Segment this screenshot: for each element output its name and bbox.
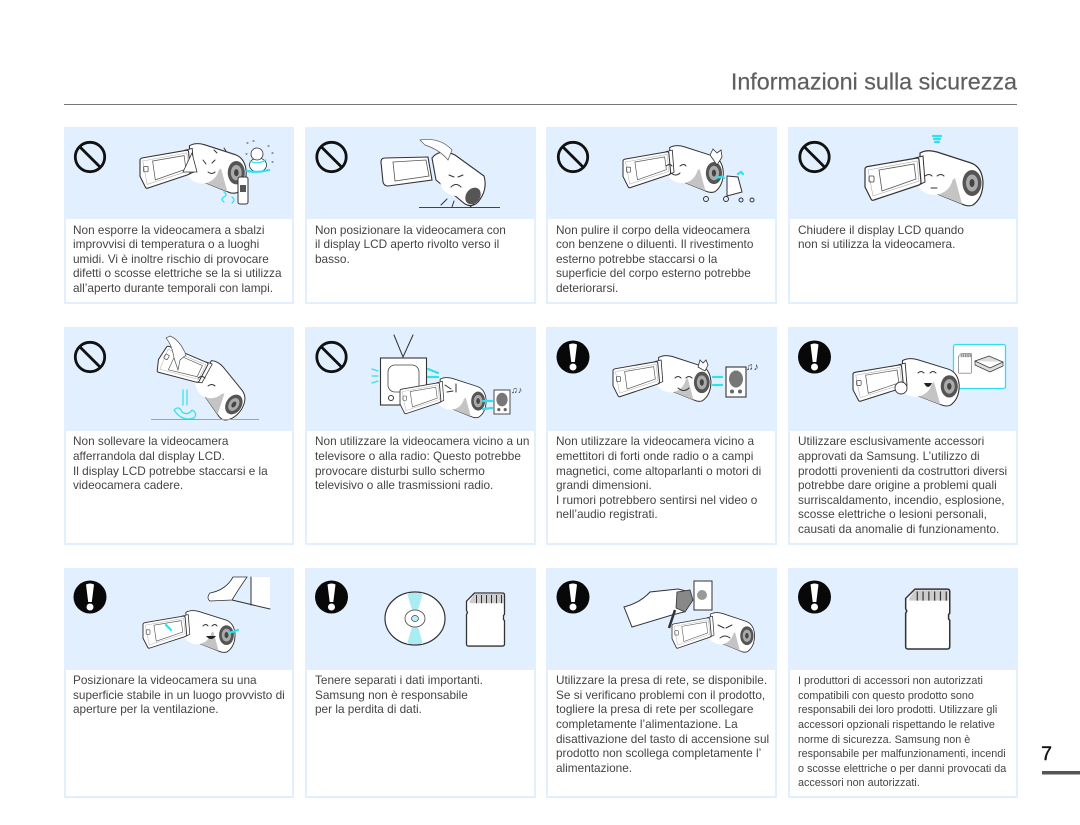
panel: cleaning xyxy=(546,127,777,304)
text block: Non pulire il corpo della videocamera xyxy=(556,223,751,237)
text block: compatibili con questo prodotto sono xyxy=(798,690,974,702)
page number: 7 xyxy=(1041,743,1052,765)
text block: accessori opzionali rispettando le relative xyxy=(798,719,995,731)
panel: close display xyxy=(788,127,1018,304)
icon: caution xyxy=(74,580,106,614)
text block: difetti o scosse elettriche se la si utilizza xyxy=(73,266,282,280)
text block: videocamera cadere. xyxy=(73,478,183,492)
icon: caution xyxy=(315,580,348,614)
text block: Utilizzare la presa di rete, se disponibile. xyxy=(556,673,767,687)
text block: provocare disturbi sullo schermo xyxy=(315,464,485,478)
text block: non si utilizza la videocamera. xyxy=(798,237,955,251)
text block xyxy=(315,223,506,266)
text block: surriscaldamento, incendio, esplosione, xyxy=(798,493,1005,507)
text block: improvvisi di temperatura o a luoghi xyxy=(73,237,259,251)
text block xyxy=(556,223,754,295)
text block xyxy=(315,673,483,716)
text block: Utilizzare esclusivamente accessori xyxy=(798,434,984,448)
icon: caution xyxy=(798,340,831,374)
icon: prohibited xyxy=(317,342,346,372)
text block xyxy=(73,434,268,492)
text block: all’aperto durante temporali con lampi. xyxy=(73,281,273,295)
panel: LCD down xyxy=(305,127,536,304)
illustration: disc and memory card xyxy=(385,592,504,646)
illustration: hand unplugging xyxy=(624,581,755,652)
text block: aperture per la ventilazione. xyxy=(73,702,219,716)
icon: prohibited xyxy=(800,142,829,172)
icon: prohibited xyxy=(558,142,588,172)
text block: Il display LCD potrebbe staccarsi e la xyxy=(73,464,268,478)
text block: superficie del corpo esterno potrebbe xyxy=(556,266,751,280)
illustration: camera near window xyxy=(143,577,270,652)
title: Informazioni sulla sicurezza xyxy=(731,68,1017,94)
text block: emettitori di forti onde radio o a campi xyxy=(556,449,753,463)
page number xyxy=(1041,743,1080,774)
text block: I produttori di accessori non autorizzati xyxy=(798,675,983,687)
text block: magnetici, come altoparlanti o motori di xyxy=(556,464,761,478)
text block: causati da anomalie di funzionamento. xyxy=(798,522,999,536)
text block xyxy=(315,434,529,492)
text block: Non utilizzare la videocamera vicino a un xyxy=(315,434,529,448)
text block xyxy=(556,434,761,521)
text block: nell’audio registrati. xyxy=(556,507,658,521)
text block: umidi. Vi è inoltre rischio di provocare xyxy=(73,252,269,266)
panel: lifting xyxy=(64,327,294,545)
illustration: memory card xyxy=(906,589,950,649)
text block xyxy=(798,675,1006,789)
illustration: TV, camera and speaker: ♫♪ xyxy=(511,385,522,395)
text block xyxy=(798,434,1007,536)
text block: Se si verificano problemi con il prodotto, xyxy=(556,688,765,702)
text block xyxy=(73,223,282,295)
text block: completamente l’alimentazione. La xyxy=(556,717,738,731)
icon: caution xyxy=(556,580,590,614)
text block: Non sollevare la videocamera xyxy=(73,434,229,448)
icon: prohibited xyxy=(75,142,105,172)
text block: Posizionare la videocamera su una xyxy=(73,673,257,687)
text block: disattivazione del tasto di accensione sul xyxy=(556,732,769,746)
text block: togliere la presa di rete per scollegare xyxy=(556,702,754,716)
illustration: camera pressed down xyxy=(381,139,500,208)
text block: superficie stabile in un luogo provvisto di xyxy=(73,688,285,702)
text block: accessori non autorizzati. xyxy=(798,777,920,789)
text block xyxy=(556,673,769,775)
text block: Non utilizzare la videocamera vicino a xyxy=(556,434,754,448)
panel: unauthorized accessories xyxy=(788,568,1018,798)
illustration: TV, camera and speaker xyxy=(372,335,522,418)
illustration: camera and solvent xyxy=(623,146,754,202)
text block: approvati da Samsung. L’utilizzo di xyxy=(798,449,980,463)
illustration: camera held by display xyxy=(150,334,259,425)
panel: TV interference xyxy=(305,327,536,545)
text block: afferrandola dal display LCD. xyxy=(73,449,225,463)
text block: prodotto non scollega completamente l’ xyxy=(556,746,761,760)
text block: basso. xyxy=(315,252,350,266)
text block: televisivo o alle trasmissioni radio. xyxy=(315,478,493,492)
text block: Non esporre la videocamera a sbalzi xyxy=(73,223,264,237)
text block: responsabili dei loro prodotti. Utilizzare gli xyxy=(798,704,997,716)
icon: prohibited xyxy=(75,342,105,372)
panel: accessories xyxy=(788,327,1018,545)
text block: il display LCD aperto rivolto verso il xyxy=(315,237,499,251)
panel: backup data xyxy=(305,568,536,798)
text block: norme di sicurezza. Samsung non è xyxy=(798,734,970,746)
text block: televisore o alla radio: Questo potrebbe xyxy=(315,449,521,463)
text block: grandi dimensioni. xyxy=(556,478,652,492)
text block: Tenere separati i dati importanti. xyxy=(315,673,483,687)
icon: prohibited xyxy=(317,142,346,172)
text block: deteriorarsi. xyxy=(556,281,618,295)
panel: power plug xyxy=(546,568,777,798)
text block: prodotti provenienti da costruttori diversi xyxy=(798,464,1007,478)
text block xyxy=(798,223,964,251)
panel: magnetic fields xyxy=(546,327,777,545)
illustration: camera with accessories xyxy=(853,344,1006,406)
text block: scosse elettriche o lesioni personali, xyxy=(798,507,987,521)
panel: ventilation xyxy=(64,568,294,798)
text block: Chiudere il display LCD quando xyxy=(798,223,964,237)
icon: caution xyxy=(798,580,831,614)
panel: temperature xyxy=(64,127,294,304)
icon: caution xyxy=(556,340,590,374)
illustration: camera and speaker: ♫♪ xyxy=(746,362,758,373)
illustration: camera and speaker xyxy=(613,356,758,401)
text block: I rumori potrebbero sentirsi nel video o xyxy=(556,493,758,507)
text block: potrebbe dare origine a problemi quali xyxy=(798,478,997,492)
text block: responsabile per malfunzionamenti, incendi xyxy=(798,748,1006,760)
text block: per la perdita di dati. xyxy=(315,702,422,716)
text block: Non posizionare la videocamera con xyxy=(315,223,506,237)
illustration: camera in temperature change xyxy=(140,141,273,204)
text block: Samsung non è responsabile xyxy=(315,688,468,702)
text block: alimentazione. xyxy=(556,761,632,775)
text block: o scosse elettriche o per danni provocati da xyxy=(798,763,1006,775)
text block: esterno potrebbe staccarsi o la xyxy=(556,252,718,266)
illustration: sleepy camera xyxy=(865,136,983,206)
text block xyxy=(73,673,285,716)
text block: con benzene o diluenti. Il rivestimento xyxy=(556,237,754,251)
